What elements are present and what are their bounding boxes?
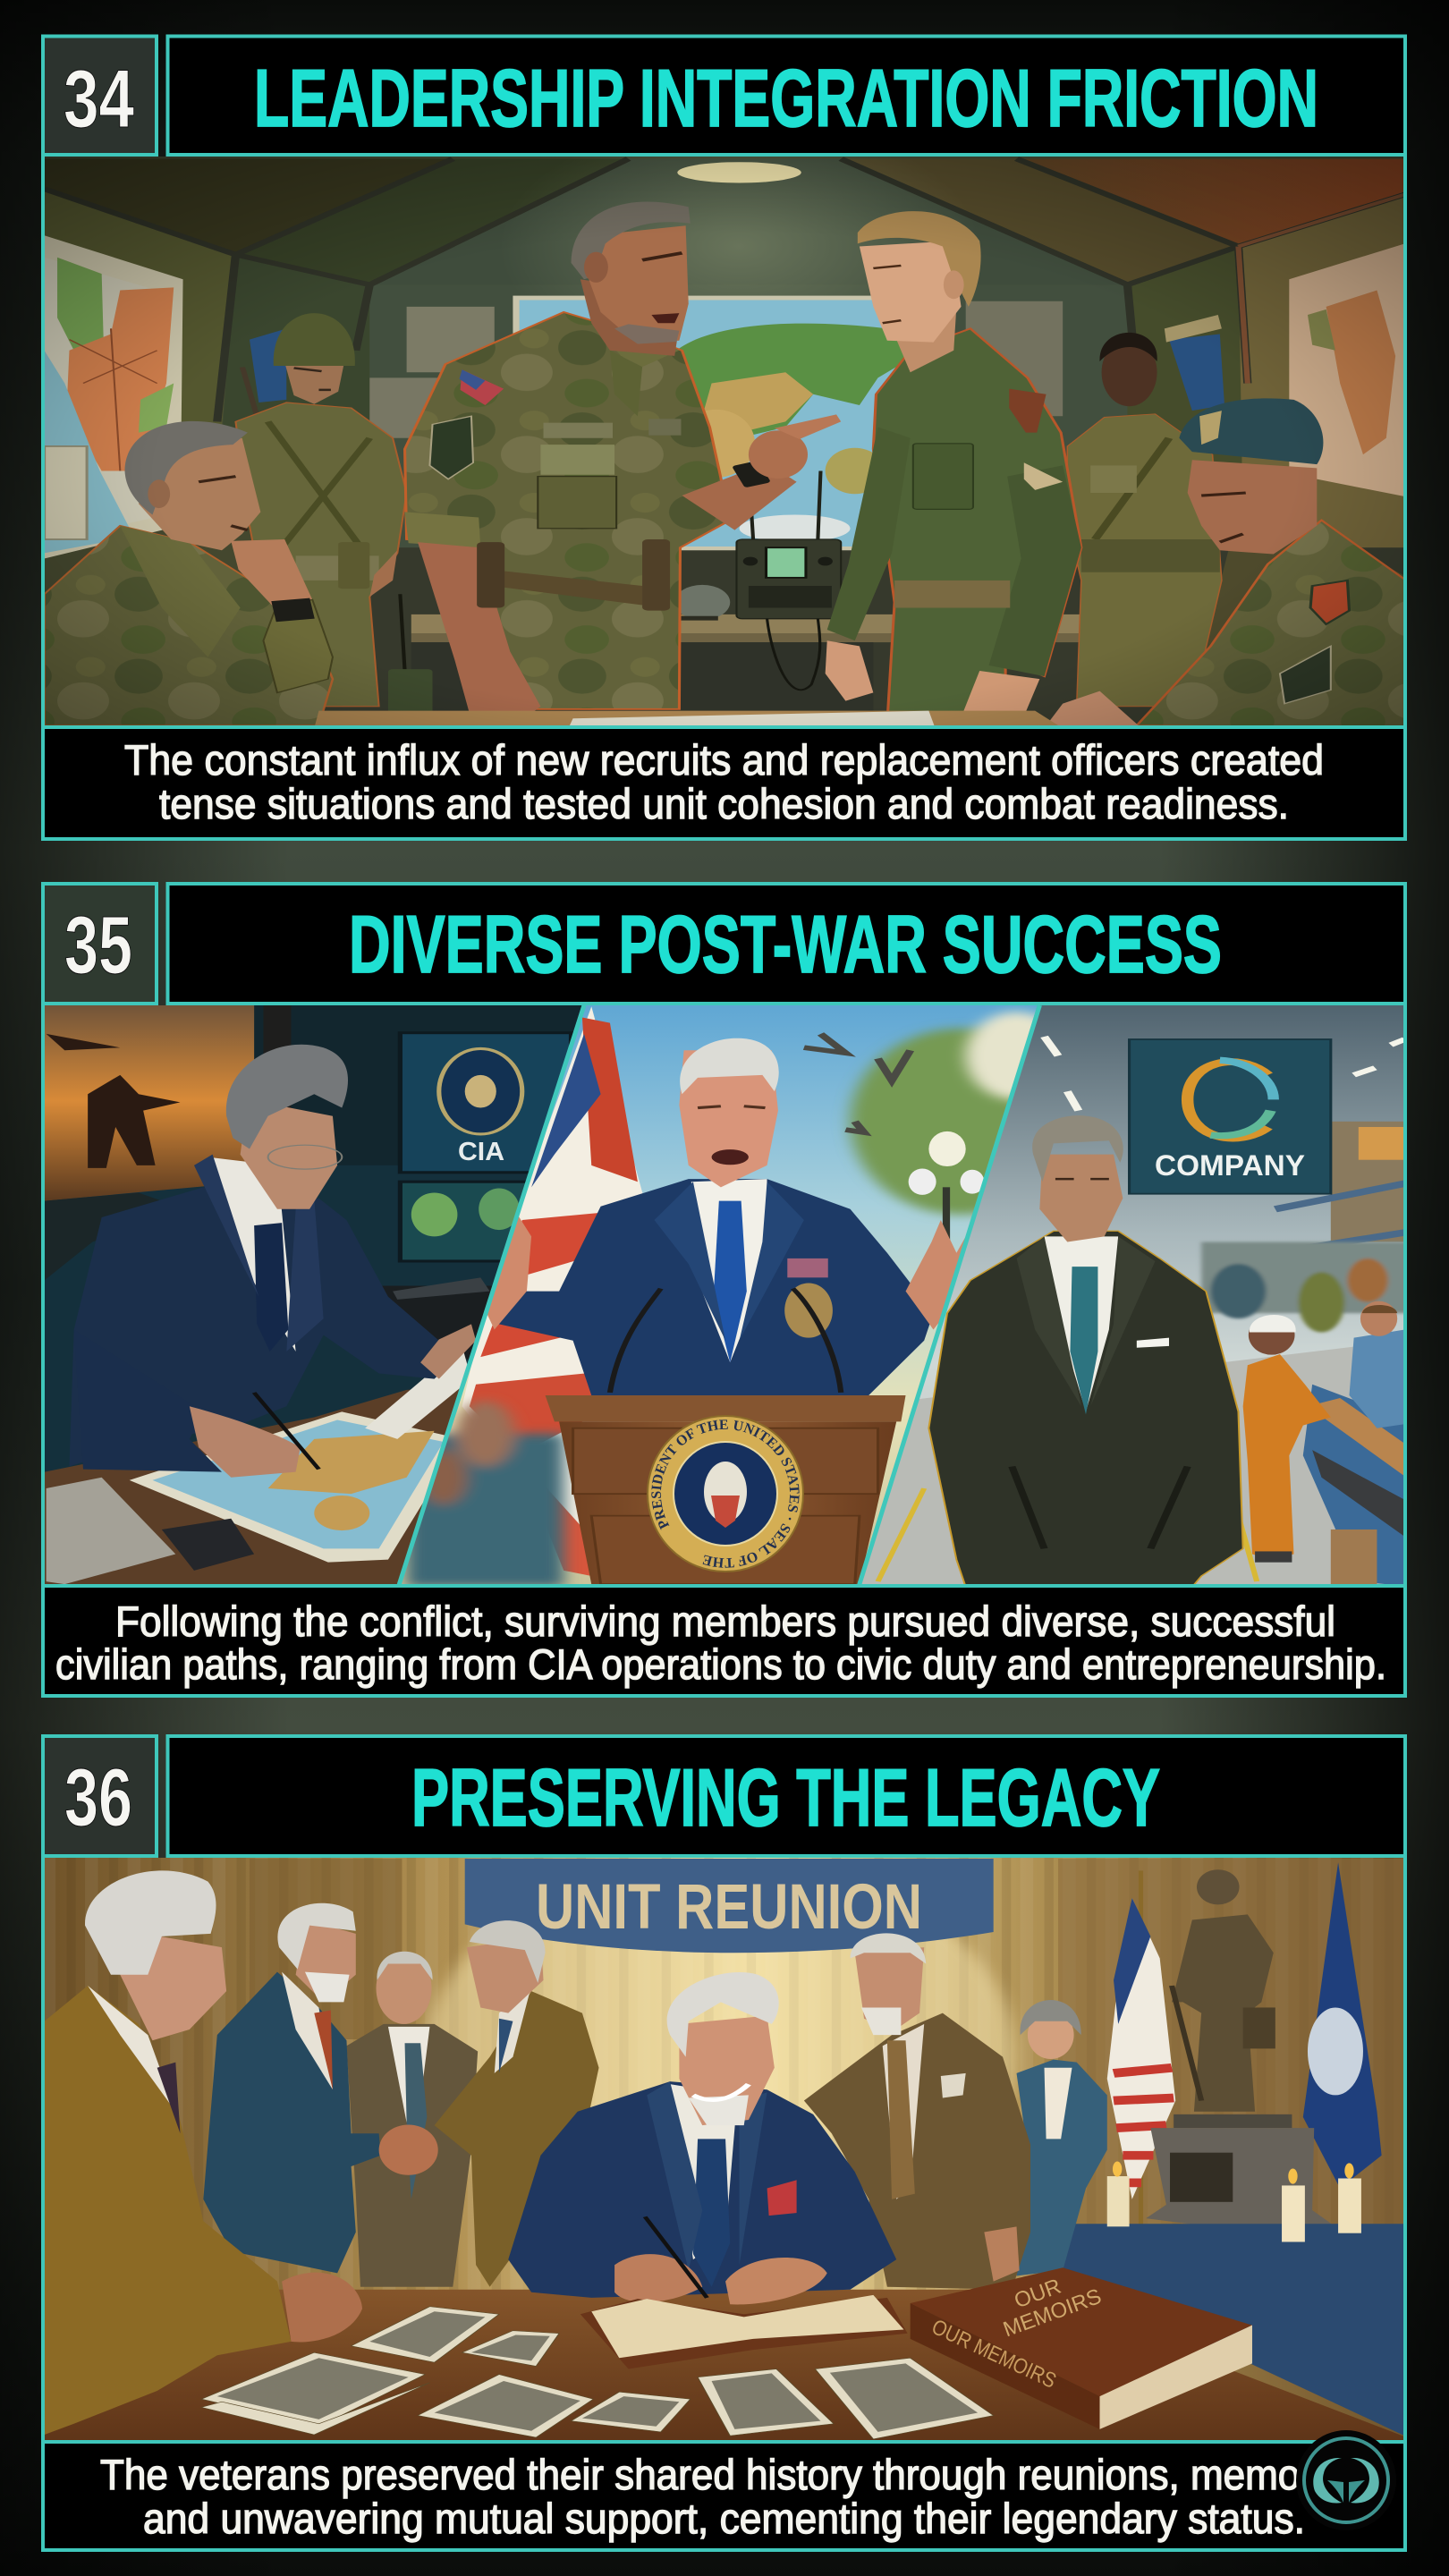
statue [1172, 1869, 1275, 2112]
title 34 [168, 36, 1405, 155]
banner label COMPANY: COMPANY [1155, 1149, 1305, 1182]
man at desk [69, 1045, 476, 1478]
section dividers [399, 1005, 1039, 1584]
banner [465, 1859, 994, 1953]
title 35 [168, 884, 1405, 1004]
book spine text: OUR MEMOIRS [928, 2315, 1060, 2394]
caption 34: tense situations and tested unit cohesion and combat readiness. [159, 780, 1289, 827]
number box 34: 34 [64, 54, 134, 145]
desk [45, 1385, 490, 1587]
man shaking hands, brown [435, 1920, 599, 2287]
back table [411, 614, 1086, 633]
radio [736, 470, 841, 690]
caption 34: The constant influx of new recruits and replacement officers created [124, 736, 1324, 784]
section: civic duty [397, 1001, 1072, 1587]
caption 34 [43, 727, 1405, 839]
open book [580, 2295, 908, 2369]
desk map [130, 1411, 462, 1563]
podium [546, 1395, 906, 1584]
caption 36 [43, 2442, 1405, 2550]
young soldier [826, 211, 1081, 723]
caption 36: and unwavering mutual support, cementing their legendary status. [143, 2495, 1305, 2542]
blue cloth table [1045, 2224, 1414, 2440]
table [45, 2290, 1414, 2445]
flag [462, 1006, 647, 1576]
panel: 34 leadership integration friction [41, 34, 1407, 841]
photos [201, 2307, 994, 2439]
right wall map [1289, 243, 1414, 498]
presidential seal: PRESIDENT OF THE UNITED STATES · SEAL OF THE [651, 1419, 800, 1568]
pedestal [1146, 2114, 1335, 2235]
US flag and air force flag [1107, 1870, 1175, 2226]
number box 34 [43, 36, 157, 155]
seated officer with beret [1046, 398, 1414, 728]
caption 35: Following the conflict, surviving members pursued diverse, successful [115, 1597, 1335, 1645]
back wall pictures [407, 307, 495, 372]
caption 35 [43, 1586, 1405, 1696]
radio on table [388, 594, 433, 726]
left wall map [45, 235, 183, 558]
businessman [928, 1115, 1243, 1587]
CIA monitor [400, 1033, 572, 1173]
panel: 35 diverse post-war success [41, 882, 1407, 1698]
section: CIA operations [37, 1001, 591, 1587]
banner text: UNIT REUNION [536, 1872, 922, 1943]
speaker [471, 1038, 966, 1395]
crowd [407, 1401, 564, 1587]
table front [314, 711, 1063, 728]
man shaking hands, blue [203, 1903, 381, 2273]
section: entrepreneurship [851, 1001, 1423, 1587]
number box 36: 36 [64, 1752, 132, 1843]
company banner [1130, 1039, 1331, 1194]
monitor label CIA: CIA [458, 1138, 504, 1166]
number box 36 [43, 1736, 157, 1856]
soldier with helmet [235, 313, 407, 707]
candles [1107, 2161, 1361, 2241]
title 36 [168, 1736, 1405, 1856]
background guest [346, 1952, 478, 2287]
woman [1017, 2000, 1107, 2275]
conveyor [1303, 1385, 1414, 1587]
book cover text: MEMOIRS [1000, 2284, 1105, 2342]
world map [513, 296, 928, 550]
book cover text: OUR [1011, 2275, 1064, 2313]
number box 35: 35 [64, 900, 132, 991]
illustration: unit reunion [37, 1854, 1414, 2445]
soldier at right back [1067, 333, 1222, 707]
logo emblem [1296, 2430, 1396, 2530]
illustration: tent argument scene [45, 157, 1403, 725]
number box 35 [43, 884, 157, 1004]
central veteran signing [508, 1972, 896, 2305]
left big man [45, 1870, 362, 2435]
name tape text: VETERAN [578, 1284, 631, 1297]
caption 36: The veterans preserved their shared history through reunions, memoirs, [100, 2451, 1352, 2498]
panel: 36 preserving the legacy [37, 1736, 1414, 2550]
veteran pointing [405, 201, 841, 724]
illustration: three career paths [45, 1005, 1403, 1584]
closed memoir book [911, 2267, 1252, 2429]
window blue [250, 328, 286, 402]
lamp [677, 162, 801, 182]
worker in orange [1243, 1315, 1331, 1563]
paper [365, 1346, 471, 1439]
veteran standing right [804, 1933, 1030, 2290]
seated officer left [45, 421, 333, 725]
